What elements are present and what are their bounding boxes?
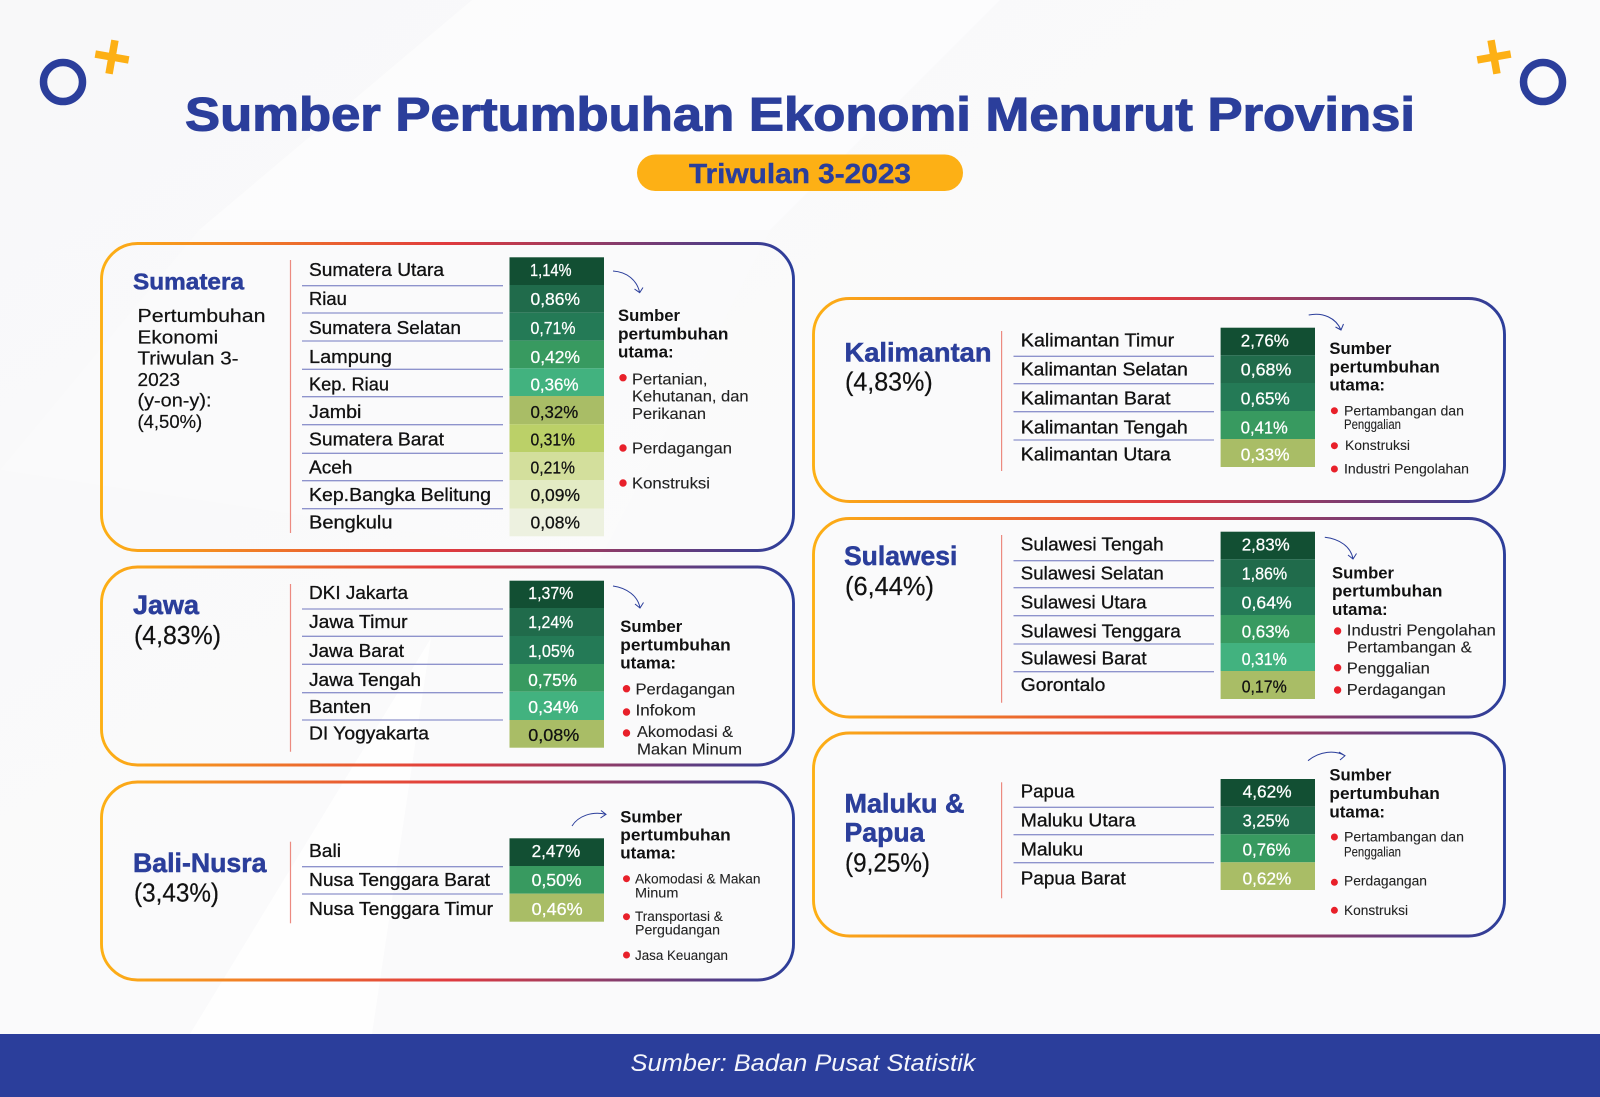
row: Nusa Tenggara Timur: 0,46% (532, 899, 583, 919)
text: main growth sources Sulawesi (1332, 565, 1496, 699)
row: Kalimantan Timur: 2,76% (1241, 330, 1289, 350)
value: Jawa growth: (4,83%) (134, 620, 221, 650)
text: growth description: 2023 (138, 369, 180, 390)
row: Kep. Riau: Kep. Riau (309, 374, 389, 394)
text: main growth sources Jawa: Akomodasi & (637, 724, 733, 741)
row: Sulawesi Selatan (1014, 559, 1315, 588)
row: Riau: Riau (309, 289, 347, 309)
arrow: Sumatera (613, 271, 643, 293)
text: main growth sources Bali-Nusra: Sumber (620, 808, 683, 826)
row: Maluku Utara (1014, 807, 1315, 835)
table: Jawa provinces (302, 581, 604, 748)
value: Kalimantan growth: (4,83%) (845, 367, 933, 397)
text: main growth sources Sumatera: Konstruksi (632, 475, 710, 492)
row: Kep.Bangka Belitung (302, 480, 604, 509)
row: Papua Barat (1021, 862, 1315, 890)
text: main growth sources Sulawesi: pertumbuhan (1332, 583, 1442, 601)
row: Kalimantan Barat: 0,65% (1241, 388, 1290, 408)
row: DKI Jakarta (302, 581, 604, 609)
text: main growth sources Sumatera: Perdagangan (632, 440, 732, 457)
text: main growth sources Jawa: Perdagangan (636, 681, 735, 698)
row: Kalimantan Tengah: Kalimantan Tengah (1021, 417, 1188, 437)
row: Jambi: Jambi (309, 402, 361, 422)
row: Kep. Riau (302, 368, 604, 397)
value: Maluku & Papua growth: (9,25%) (845, 848, 930, 878)
row: DKI Jakarta: DKI Jakarta (309, 583, 409, 603)
row: Kalimantan Selatan: 0,68% (1241, 359, 1291, 379)
row: Bengkulu: Bengkulu (309, 513, 392, 533)
row: Sumatera Barat: 0,31% (530, 430, 575, 450)
text: growth description (138, 305, 266, 432)
arrow: Sulawesi (1325, 537, 1356, 559)
row: Sulawesi Tengah (1014, 532, 1315, 561)
row: Sulawesi Utara: 0,64% (1242, 593, 1292, 613)
text: growth description: (y-on-y): (138, 390, 212, 411)
row: Sulawesi Utara (1014, 587, 1315, 616)
icon: left circle (44, 62, 82, 102)
row: Papua: Papua (1021, 781, 1076, 801)
footer bar (0, 1034, 1600, 1097)
row: Jambi (302, 396, 604, 425)
row: Kalimantan Timur (1014, 328, 1315, 356)
text: main growth sources Bali-Nusra: pertumbuhan (620, 826, 731, 844)
value: Bali-Nusra growth: (3,43%) (134, 878, 219, 908)
text: main growth sources Sumatera: utama: (618, 344, 674, 362)
row: Papua Barat: 0,62% (1243, 868, 1291, 888)
arrow: Bali-Nusra (572, 810, 606, 826)
row: Jawa Barat: 1,05% (528, 641, 574, 661)
table: Sulawesi provinces (1014, 532, 1315, 699)
table: Sumatera provinces (302, 257, 604, 536)
row: Jawa Timur: Jawa Timur (309, 612, 408, 632)
row: Nusa Tenggara Barat: Nusa Tenggara Barat (309, 870, 490, 890)
row: Gorontalo: Gorontalo (1021, 675, 1105, 695)
row: Kalimantan Barat (1014, 383, 1315, 412)
text: main growth sources Bali-Nusra (620, 808, 760, 963)
text: growth description: Ekonomi (138, 326, 218, 347)
text: main growth sources Bali-Nusra: Pergudangan (635, 923, 720, 938)
table: Maluku & Papua provinces (1014, 779, 1315, 890)
row: Jawa Tengah: 0,75% (528, 670, 577, 690)
arrow: Jawa (613, 586, 644, 608)
row: Banten: Banten (309, 697, 371, 717)
text: main growth sources Kalimantan: utama: (1329, 377, 1385, 395)
row: Aceh: 0,21% (530, 457, 575, 477)
row: Papua Barat: Papua Barat (1021, 868, 1126, 888)
text: main growth sources Kalimantan (1329, 340, 1469, 476)
heading: Maluku & Papua (844, 789, 964, 848)
row: Sulawesi Tengah: 2,83% (1242, 535, 1290, 555)
row: Sulawesi Tenggara: 0,63% (1242, 621, 1290, 641)
row: Nusa Tenggara Barat: 0,50% (532, 870, 582, 890)
row: Sulawesi Selatan: 1,86% (1242, 564, 1287, 584)
text: main growth sources Jawa: utama: (620, 655, 676, 673)
source note: Sumber: Badan Pusat Statistik (630, 1050, 978, 1077)
row: Jawa Tengah (302, 664, 604, 693)
text: main growth sources Maluku & Papua: Konstruksi (1344, 903, 1408, 918)
row: Sumatera Selatan (302, 313, 604, 341)
text: main growth sources Kalimantan: Industri Pengolahan (1344, 461, 1469, 476)
row: Bengkulu (309, 509, 604, 536)
row: Maluku: 0,76% (1243, 839, 1291, 859)
row: Kep. Riau: 0,36% (530, 374, 578, 394)
text: main growth sources Maluku & Papua: Perdagangan (1344, 874, 1427, 889)
icon: right circle (1524, 62, 1562, 102)
text: main growth sources Sulawesi: Penggalian (1347, 660, 1430, 677)
row: Lampung: 0,42% (530, 347, 580, 367)
row: Sumatera Utara: Sumatera Utara (309, 260, 445, 280)
row: Kalimantan Utara (1021, 439, 1315, 467)
text: main growth sources Kalimantan: Pertambangan dan (1344, 403, 1464, 418)
row: Banten: 0,34% (528, 697, 578, 717)
row: Sumatera Utara: 1,14% (530, 260, 572, 280)
row: Maluku: Maluku (1021, 839, 1083, 859)
row: Kalimantan Utara: Kalimantan Utara (1021, 445, 1172, 465)
row: Kep.Bangka Belitung: 0,09% (530, 485, 580, 505)
icon: right plus (1474, 37, 1514, 77)
icon: left plus (92, 37, 132, 77)
text: main growth sources Bali-Nusra: Akomodasi & Makan (635, 871, 760, 886)
text: main growth sources Kalimantan: Sumber (1329, 340, 1392, 358)
title: Sumber Pertumbuhan Ekonomi Menurut Provinsi (185, 88, 1415, 140)
row: Kalimantan Tengah (1014, 411, 1315, 440)
panel: Sulawesi (814, 518, 1504, 717)
heading: Maluku & Papua: Maluku & (844, 789, 964, 819)
row: DI Yogyakarta (309, 720, 604, 748)
row: Jawa Timur: 1,24% (528, 612, 573, 632)
row: Lampung (302, 341, 604, 369)
row: DKI Jakarta: 1,37% (528, 583, 573, 603)
row: Bali (302, 838, 604, 867)
row: Nusa Tenggara Timur (309, 894, 604, 922)
row: Nusa Tenggara Barat (302, 866, 604, 894)
text: main growth sources Kalimantan: Penggalian (1344, 417, 1401, 432)
heading: Sumatera: Sumatera (133, 268, 245, 294)
text: main growth sources Jawa: Infokom (636, 702, 696, 719)
row: Kalimantan Barat: Kalimantan Barat (1021, 388, 1170, 408)
panel: Kalimantan (814, 298, 1504, 502)
heading: Maluku & Papua: Papua (844, 818, 925, 848)
text: main growth sources Sulawesi: Perdagangan (1347, 682, 1446, 699)
row: Bengkulu: 0,08% (530, 513, 580, 533)
subtitle pill: Triwulan 3-2023 (689, 158, 911, 189)
text: main growth sources Sumatera: Sumber (618, 307, 681, 325)
row: Bali: Bali (309, 841, 341, 861)
text: main growth sources Maluku & Papua: Sumber (1329, 767, 1392, 785)
text: growth description: Pertumbuhan (138, 305, 266, 326)
text: main growth sources Maluku & Papua: Penggalian (1344, 844, 1401, 859)
row: Sumatera Utara (302, 257, 604, 286)
text: main growth sources Maluku & Papua: Pertambangan dan (1344, 830, 1464, 845)
row: Kalimantan Selatan (1014, 355, 1315, 384)
row: Nusa Tenggara Timur: Nusa Tenggara Timur (309, 899, 493, 919)
text: main growth sources Sumatera: Perikanan (632, 406, 706, 423)
text: main growth sources Jawa (620, 618, 742, 759)
row: Sulawesi Barat: 0,31% (1242, 649, 1287, 669)
text: main growth sources Sulawesi: Industri Pengolahan (1347, 622, 1496, 639)
table: Kalimantan provinces (1014, 328, 1315, 467)
row: Jawa Timur (302, 608, 604, 636)
row: Sulawesi Utara: Sulawesi Utara (1021, 593, 1148, 613)
value: Sulawesi growth: (6,44%) (845, 571, 934, 601)
arrow: Kalimantan (1309, 314, 1344, 330)
row: Kalimantan Timur: Kalimantan Timur (1021, 330, 1174, 350)
row: Maluku Utara: 3,25% (1243, 810, 1289, 830)
heading: Bali-Nusra: Bali-Nusra (133, 848, 267, 878)
text: growth description: (4,50%) (138, 411, 202, 432)
text: main growth sources Jawa: pertumbuhan (620, 636, 731, 654)
row: Sulawesi Tenggara (1014, 615, 1315, 644)
text: main growth sources Bali-Nusra: Transportasi & (635, 909, 723, 924)
heading: Sulawesi: Sulawesi (844, 541, 957, 571)
row: Kalimantan Selatan: Kalimantan Selatan (1021, 359, 1188, 379)
text: main growth sources Bali-Nusra: Minum (635, 886, 678, 901)
subtitle pill (637, 154, 963, 191)
text: main growth sources Sumatera (618, 307, 749, 492)
row: Sulawesi Barat (1014, 643, 1315, 672)
arrow: Maluku & Papua (1308, 752, 1345, 761)
row: Sulawesi Barat: Sulawesi Barat (1021, 648, 1147, 668)
row: Lampung: Lampung (309, 347, 392, 367)
row: Aceh (302, 452, 604, 481)
row: Maluku Utara: Maluku Utara (1021, 810, 1137, 830)
text: main growth sources Sumatera: pertumbuhan (618, 325, 728, 343)
row: Gorontalo: 0,17% (1242, 677, 1287, 697)
row: Sulawesi Tengah: Sulawesi Tengah (1021, 535, 1164, 555)
text: main growth sources Bali-Nusra: Jasa Keuangan (635, 948, 728, 963)
row: Bali: 2,47% (532, 841, 580, 861)
row: Jambi: 0,32% (530, 402, 578, 422)
row: DI Yogyakarta: DI Yogyakarta (309, 724, 430, 744)
table: Bali-Nusra provinces (302, 838, 604, 922)
panel: Bali-Nusra (102, 782, 794, 980)
row: Sumatera Selatan: 0,71% (530, 318, 576, 338)
text: main growth sources Sulawesi: Sumber (1332, 565, 1395, 583)
heading: Kalimantan: Kalimantan (844, 338, 992, 368)
text: main growth sources Sulawesi: utama: (1332, 601, 1388, 619)
text: main growth sources Sumatera: Kehutanan, dan (632, 388, 749, 406)
row: Sumatera Selatan: Sumatera Selatan (309, 318, 461, 338)
row: Sumatera Barat: Sumatera Barat (309, 430, 444, 450)
text: main growth sources Maluku & Papua (1329, 767, 1464, 918)
text: main growth sources Kalimantan: pertumbuhan (1329, 358, 1440, 376)
row: Kep.Bangka Belitung: Kep.Bangka Belitung (309, 485, 491, 505)
text: main growth sources Maluku & Papua: utama: (1329, 803, 1385, 821)
row: DI Yogyakarta: 0,08% (528, 725, 579, 745)
text: main growth sources Maluku & Papua: pertumbuhan (1329, 785, 1440, 803)
row: Jawa Barat (302, 636, 604, 664)
row: Jawa Barat: Jawa Barat (309, 641, 404, 661)
text: main growth sources Sulawesi: Pertambangan & (1347, 640, 1472, 657)
panel: Jawa (102, 567, 794, 765)
row: Aceh: Aceh (309, 457, 352, 477)
text: growth description: Triwulan 3- (138, 348, 238, 369)
text: main growth sources Jawa: Makan Minum (637, 742, 742, 759)
row: Papua (1014, 779, 1315, 807)
row: Jawa Tengah: Jawa Tengah (309, 670, 421, 690)
panel: Sumatera (102, 244, 794, 550)
row: Sulawesi Tenggara: Sulawesi Tenggara (1021, 621, 1182, 641)
text: main growth sources Jawa: Sumber (620, 618, 683, 636)
row: Kalimantan Tengah: 0,41% (1241, 417, 1288, 437)
row: Sumatera Barat (302, 424, 604, 453)
panel: Maluku & Papua (814, 733, 1504, 936)
row: Banten (302, 692, 604, 720)
row: Sulawesi Selatan: Sulawesi Selatan (1021, 564, 1164, 584)
row: Gorontalo (1021, 671, 1315, 699)
heading: Jawa: Jawa (133, 590, 199, 620)
row: Kalimantan Utara: 0,33% (1241, 445, 1290, 465)
text: main growth sources Kalimantan: Konstruksi (1345, 438, 1410, 453)
row: Riau (302, 285, 604, 313)
row: Riau: 0,86% (530, 289, 580, 309)
row: Maluku (1014, 834, 1315, 863)
text: main growth sources Sumatera: Pertanian, (632, 372, 708, 389)
row: Papua: 4,62% (1243, 781, 1292, 801)
text: main growth sources Bali-Nusra: utama: (620, 845, 676, 863)
